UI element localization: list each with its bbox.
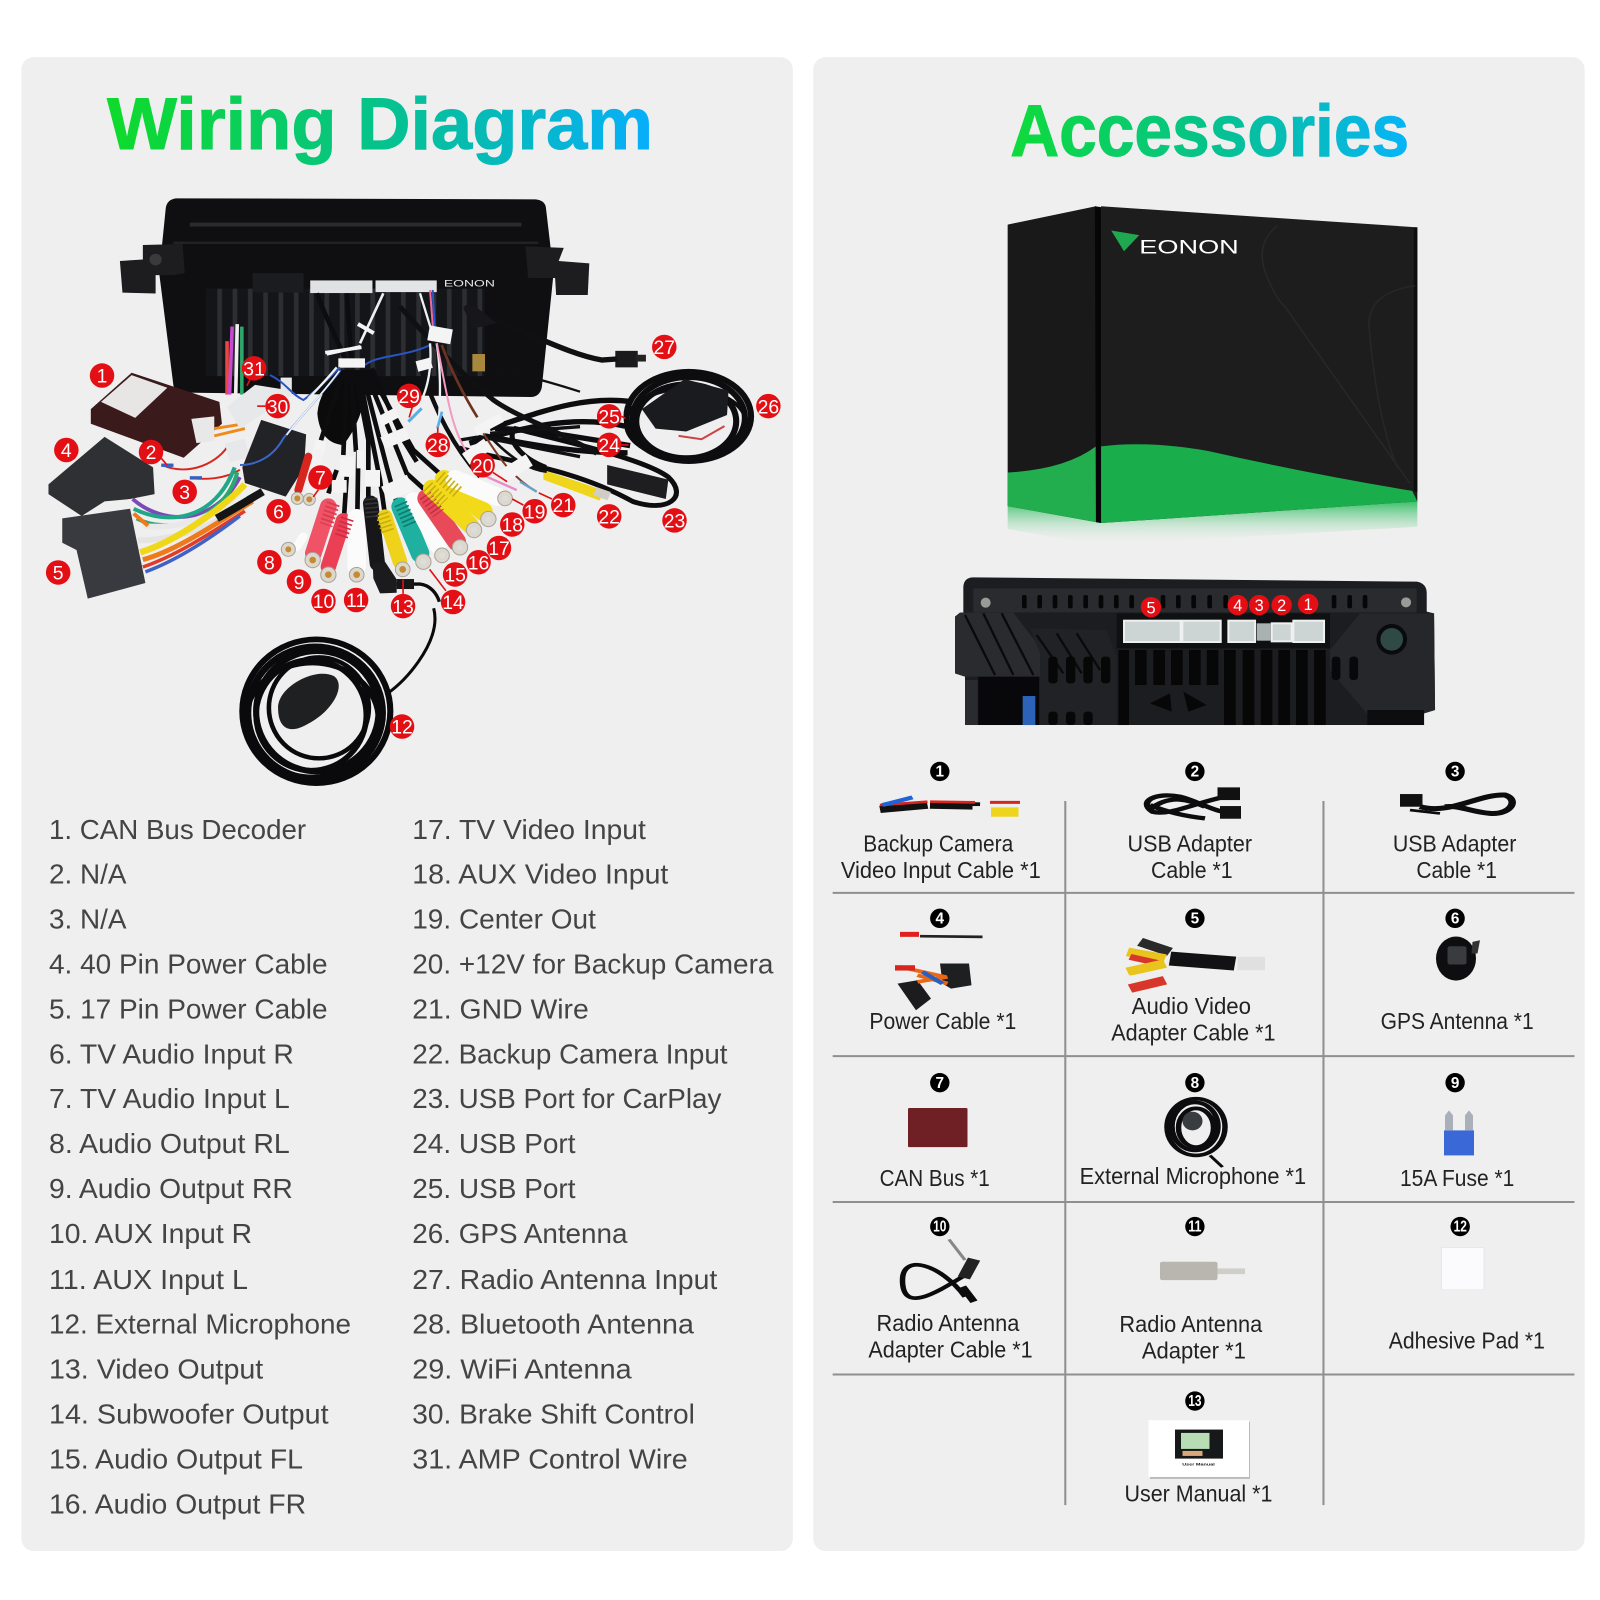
white connector cluster bbox=[225, 378, 292, 462]
RCA plug ridges bbox=[326, 477, 458, 538]
panel: accessories bbox=[813, 57, 1585, 1551]
callouts: red port numbers: 1 bbox=[1304, 596, 1313, 614]
icon: audio video cable bbox=[1125, 942, 1265, 989]
text block: connector list 17-31: 28. Bluetooth Antenna bbox=[412, 1309, 695, 1340]
text block: connector list 1-16: 9. Audio Output RR bbox=[49, 1173, 293, 1204]
white and blue control wires bbox=[240, 367, 341, 465]
callouts: red numbers: 17 bbox=[488, 538, 510, 560]
cable tags bbox=[311, 322, 533, 502]
text: accessory captions: User Manual *1 bbox=[1124, 1481, 1272, 1507]
callouts: red numbers: 14 bbox=[442, 592, 464, 614]
text block: connector list 1-16: 6. TV Audio Input R bbox=[49, 1038, 294, 1069]
RCA tips bbox=[281, 491, 512, 582]
text block: connector list 17-31: 21. GND Wire bbox=[412, 993, 589, 1024]
black item numbers: 7 bbox=[936, 1075, 944, 1092]
text block: connector list 17-31 bbox=[412, 814, 774, 1474]
RCA plug bodies bbox=[297, 453, 497, 567]
callouts: red numbers: 8 bbox=[264, 552, 275, 574]
vents bbox=[1022, 595, 1367, 608]
accessory thumbnails row 10-13 bbox=[902, 1239, 1484, 1479]
text block: connector list 1-16: 1. CAN Bus Decoder bbox=[49, 814, 306, 845]
callouts: red numbers: 1 bbox=[97, 366, 107, 388]
mic cable and coil bbox=[242, 608, 435, 783]
photo: cable fan and RCA plugs bbox=[240, 290, 617, 602]
tie wrap near hub bbox=[327, 347, 361, 354]
screws bbox=[981, 597, 1411, 608]
icon: external microphone bbox=[1167, 1099, 1225, 1167]
text: accessory captions: Cable *1 bbox=[1416, 857, 1497, 883]
connector housing bbox=[1117, 613, 1330, 648]
callouts: red numbers: 22 bbox=[598, 506, 620, 528]
callouts: red port numbers: 3 bbox=[1255, 597, 1264, 615]
module box bbox=[242, 420, 306, 497]
power harness wires bbox=[133, 467, 263, 572]
callouts: red numbers bbox=[46, 335, 781, 739]
black item numbers: 9 bbox=[1451, 1075, 1459, 1092]
text block: connector list 1-16: 7. TV Audio Input L bbox=[49, 1083, 290, 1114]
callouts: red leader lines bbox=[161, 380, 629, 594]
text block: connector list 1-16: 15. Audio Output FL bbox=[49, 1443, 303, 1474]
text block: connector list 1-16: 5. 17 Pin Power Cable bbox=[49, 993, 328, 1024]
black item numbers: 5 bbox=[1191, 910, 1200, 927]
text: accessory captions: External Microphone *1 bbox=[1080, 1163, 1306, 1189]
text block: connector list 1-16: 12. External Microphone bbox=[49, 1309, 351, 1340]
diagonal fins bbox=[955, 613, 1117, 725]
icon: GPS antenna bbox=[1436, 937, 1480, 981]
callouts: red port numbers: 4 bbox=[1233, 597, 1242, 615]
Eonon logo: EONON bbox=[1139, 237, 1239, 258]
L-shaped video jack and mic lead bbox=[373, 562, 439, 602]
text: accessory captions: Power Cable *1 bbox=[869, 1008, 1016, 1034]
text: accessory captions: Radio Antenna bbox=[1119, 1311, 1263, 1337]
brake wires bbox=[161, 443, 240, 480]
text: accessory captions: USB Adapter bbox=[1128, 831, 1252, 857]
text: accessory captions: Radio Antenna bbox=[877, 1310, 1020, 1336]
antenna jack bbox=[1330, 613, 1435, 725]
radio and antenna leads bbox=[400, 305, 617, 477]
text: accessory captions: CAN Bus *1 bbox=[880, 1165, 990, 1191]
callouts: red numbers: 21 bbox=[552, 495, 574, 517]
text: accessory captions: Video Input Cable *1 bbox=[841, 857, 1041, 883]
callouts: red numbers: 3 bbox=[179, 482, 190, 504]
callouts: red numbers: 29 bbox=[398, 386, 420, 408]
black item numbers: 13 bbox=[1188, 1393, 1202, 1410]
text: accessory captions: USB Adapter bbox=[1393, 831, 1516, 857]
40 pin connector bbox=[48, 437, 155, 516]
text: accessory captions: Adapter Cable *1 bbox=[868, 1337, 1033, 1363]
icon: CAN bus bbox=[908, 1108, 967, 1147]
callouts: red numbers: 4 bbox=[61, 440, 72, 462]
icon: radio antenna adapter cable bbox=[902, 1239, 980, 1302]
black harness bbox=[317, 293, 447, 517]
callouts: red numbers: 11 bbox=[346, 590, 366, 612]
head unit rear: EONON bbox=[444, 279, 495, 289]
callouts: red numbers: 7 bbox=[315, 468, 326, 490]
text block: connector list 17-31: 19. Center Out bbox=[412, 904, 596, 935]
heading: Accessories: Accessories bbox=[1010, 89, 1409, 172]
text: accessory captions: Adapter Cable *1 bbox=[1111, 1019, 1276, 1045]
colored thin wires bbox=[360, 290, 537, 492]
accessories grid lines bbox=[833, 801, 1574, 1505]
black item numbers: 12 bbox=[1454, 1219, 1467, 1236]
callouts: red numbers: 12 bbox=[391, 717, 413, 739]
text block: connector list 1-16: 4. 40 Pin Power Cable bbox=[49, 948, 328, 979]
text block: connector list 1-16: 16. Audio Output FR bbox=[49, 1488, 306, 1519]
callouts: red numbers: 18 bbox=[501, 515, 523, 537]
icon: USB cable 2 bbox=[1147, 787, 1241, 819]
icon: radio antenna adapter bbox=[1160, 1262, 1245, 1280]
photo: head unit and left-side harness bbox=[48, 198, 751, 783]
callouts: red port numbers: 2 bbox=[1277, 597, 1286, 615]
text: accessory captions: Cable *1 bbox=[1151, 857, 1233, 883]
callouts: red numbers: 19 bbox=[524, 501, 545, 523]
product box bbox=[1008, 206, 1417, 545]
text block: connector list 17-31: 23. USB Port for CarPlay bbox=[412, 1083, 722, 1114]
callouts: red numbers: 26 bbox=[758, 396, 779, 418]
text block: connector list 17-31: 25. USB Port bbox=[412, 1173, 576, 1204]
callouts: red numbers: 5 bbox=[53, 563, 64, 585]
text block: connector list 1-16: 8. Audio Output RL bbox=[49, 1128, 290, 1159]
17 pin connector bbox=[62, 509, 145, 599]
RCA tip centres bbox=[285, 495, 508, 578]
text block: connector list 17-31: 31. AMP Control Wire bbox=[412, 1443, 688, 1474]
accessory thumbnails row 1-3 and 4-9 bbox=[880, 787, 1512, 1167]
callouts: red numbers: 6 bbox=[273, 501, 284, 523]
text block: connector list 17-31: 18. AUX Video Input bbox=[412, 859, 669, 890]
text: accessory captions: Backup Camera bbox=[863, 831, 1014, 857]
fin slots bbox=[1048, 650, 1326, 725]
radio antenna connector bbox=[615, 351, 646, 367]
callouts: red numbers: 20 bbox=[472, 455, 494, 477]
black item numbers: 10 bbox=[933, 1219, 946, 1236]
text block: connector list 17-31: 24. USB Port bbox=[412, 1128, 576, 1159]
text block: connector list 17-31: 30. Brake Shift Control bbox=[412, 1398, 695, 1429]
text block: connector list 17-31: 29. WiFi Antenna bbox=[412, 1354, 632, 1385]
callouts: red numbers: 9 bbox=[294, 572, 304, 594]
ferrite blob bbox=[317, 380, 367, 445]
text block: connector list 1-16: 14. Subwoofer Output bbox=[49, 1398, 329, 1429]
icon: user manual bbox=[1148, 1420, 1250, 1479]
black item numbers: 11 bbox=[1188, 1219, 1202, 1236]
text: accessory captions: 15A Fuse *1 bbox=[1400, 1165, 1514, 1191]
text block: connector list 17-31: 17. TV Video Input bbox=[412, 814, 646, 845]
AMP wires bbox=[227, 324, 242, 395]
callouts: red numbers: 31 bbox=[243, 359, 265, 381]
text block: connector list 1-16 bbox=[49, 814, 351, 1519]
text: accessory captions: Audio Video bbox=[1132, 993, 1251, 1019]
callouts: red numbers: 10 bbox=[313, 591, 334, 613]
text block: connector list 1-16: 2. N/A bbox=[49, 859, 127, 890]
black item numbers: 8 bbox=[1191, 1075, 1200, 1092]
icon: adhesive pad bbox=[1442, 1248, 1484, 1290]
Eonon logo bbox=[1111, 231, 1239, 258]
callouts: red numbers: 2 bbox=[146, 442, 156, 464]
black item numbers: 6 bbox=[1451, 910, 1459, 927]
mounting brackets bbox=[120, 244, 589, 295]
text block: connector list 1-16: 11. AUX Input L bbox=[49, 1264, 248, 1295]
callouts: red port numbers: 5 bbox=[1146, 599, 1156, 617]
black item numbers bbox=[930, 762, 1470, 1411]
icon: user manual: User Manual bbox=[1182, 1462, 1215, 1466]
text block: connector list 17-31: 27. Radio Antenna Input bbox=[412, 1264, 718, 1295]
callouts: red numbers: 25 bbox=[598, 406, 620, 428]
text block: connector list 1-16: 13. Video Output bbox=[49, 1354, 264, 1385]
callouts: red numbers: 30 bbox=[267, 396, 289, 418]
text: accessory captions: Adapter *1 bbox=[1142, 1338, 1246, 1364]
power block bbox=[965, 677, 1039, 725]
callouts: red numbers: 15 bbox=[444, 565, 466, 587]
text block: connector list 17-31: 20. +12V for Backup Camera bbox=[412, 948, 774, 979]
text block: connector list 17-31: 22. Backup Camera Input bbox=[412, 1038, 728, 1069]
black item numbers: 1 bbox=[936, 764, 945, 781]
CAN bus decoder bbox=[91, 373, 245, 458]
text block: connector list 1-16: 3. N/A bbox=[49, 904, 127, 935]
icon: USB cable 3 bbox=[1400, 794, 1512, 814]
callouts: red numbers: 16 bbox=[468, 552, 489, 574]
black item numbers: 3 bbox=[1451, 764, 1459, 781]
icon: power cable bbox=[895, 932, 982, 1010]
callouts: red numbers: 28 bbox=[427, 435, 449, 457]
text: accessory captions: GPS Antenna *1 bbox=[1381, 1008, 1534, 1034]
callouts: red numbers: 24 bbox=[598, 435, 620, 457]
black item numbers: 4 bbox=[936, 910, 945, 927]
icon: backup camera cable bbox=[880, 797, 1020, 820]
icon: fuse bbox=[1444, 1110, 1474, 1155]
panel: wiring diagram bbox=[21, 57, 793, 1551]
callouts: red numbers: 23 bbox=[664, 511, 685, 533]
heading: Wiring Diagram: Wiring Diagram bbox=[107, 82, 653, 165]
head unit rear connector view bbox=[955, 577, 1435, 725]
head unit rear bbox=[159, 198, 554, 397]
text: accessory captions bbox=[841, 831, 1545, 1507]
callouts: red numbers: 13 bbox=[392, 596, 414, 618]
USB cables and GPS coil bbox=[459, 372, 751, 506]
text: accessory captions: Adhesive Pad *1 bbox=[1389, 1327, 1545, 1353]
yellow backup camera plug bbox=[543, 470, 611, 500]
callouts: red numbers: 27 bbox=[654, 337, 675, 359]
black item numbers: 2 bbox=[1191, 764, 1199, 781]
text block: connector list 1-16: 10. AUX Input R bbox=[49, 1218, 252, 1249]
callouts: red port numbers bbox=[1141, 594, 1318, 617]
text block: connector list 17-31: 26. GPS Antenna bbox=[412, 1218, 628, 1249]
